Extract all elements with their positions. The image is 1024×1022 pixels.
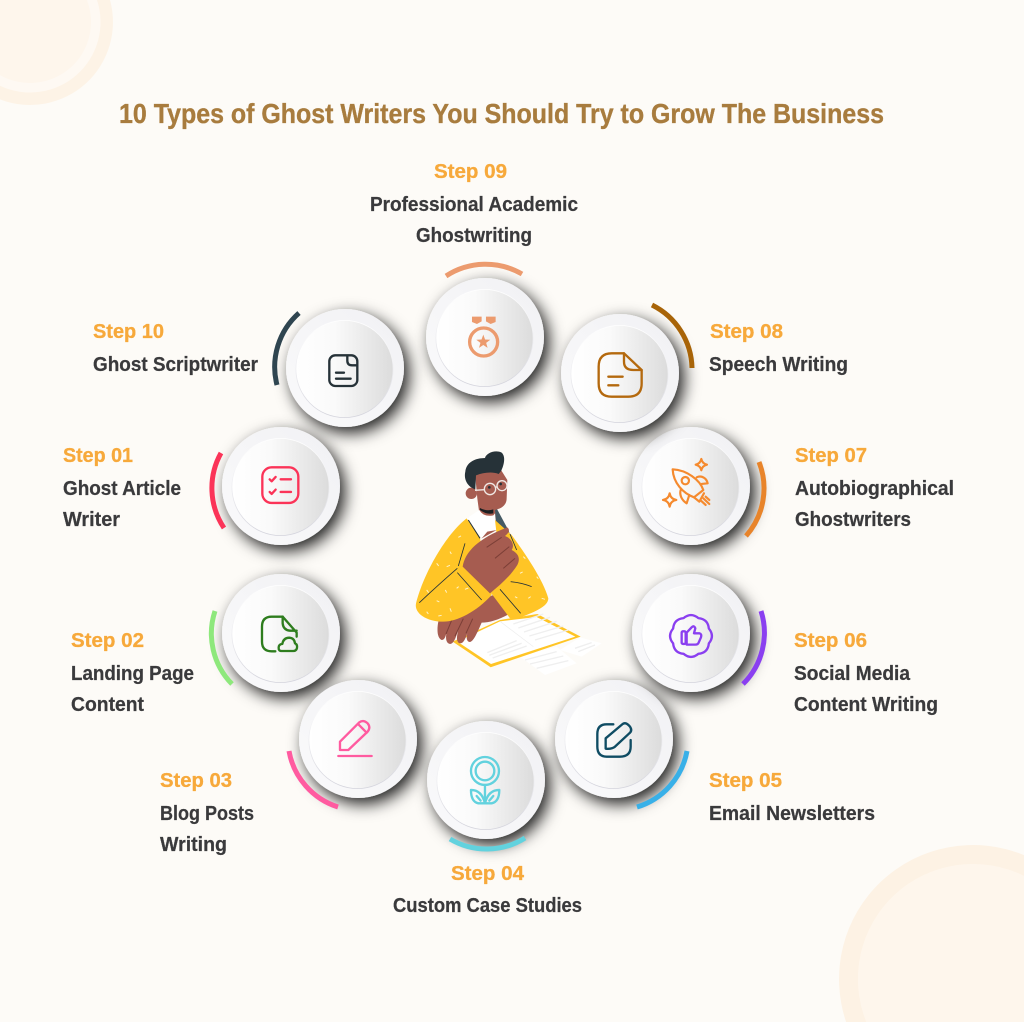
arc: step 07 [746,462,764,536]
label: step 02: Step 02 [71,630,144,652]
icon: thumbs up badge [670,615,712,657]
icon: document [329,355,357,386]
label: step 03: Writing [160,833,227,856]
arc: step 09 [446,264,522,276]
panel: step 02 medallion [222,574,340,692]
panel: step 08 medallion [561,314,679,432]
panel: step 09 medallion [426,278,544,396]
arc: step 05 [637,751,687,807]
label: step 04: Custom Case Studies [393,894,582,917]
label: step 10: Ghost Scriptwriter [93,353,258,376]
icon: edit [597,723,631,757]
arc: step 08 [652,305,692,368]
panel: step 06 medallion [632,574,750,692]
label: step 10: Step 10 [93,321,164,343]
icon: flower [471,757,499,803]
lower hand [437,595,512,644]
label: step 08: Speech Writing [709,353,848,376]
yellow jacket [416,518,492,622]
label: step 01 [63,445,181,531]
label: step 01: Ghost Article [63,477,181,500]
loose paper sheets [520,637,602,675]
panel: step 01 medallion [222,427,340,545]
label: step 05: Email Newsletters [709,802,875,825]
arc: step 02 [211,611,232,684]
label: step 05: Step 05 [709,770,782,792]
jacket fabric lines [419,520,545,616]
label: step 02 [71,630,194,716]
label: step 09 [370,161,578,247]
label: step 03: Step 03 [160,770,232,792]
label: step 01: Step 01 [63,445,133,467]
illustration: thinking writer [416,451,602,675]
label: step 06 [794,630,938,716]
upper hand [463,527,519,593]
label: step 06: Content Writing [794,693,938,716]
arc: step 06 [743,611,764,684]
label: step 06: Social Media [794,662,911,685]
arc: step 10 [275,313,299,385]
label: step 08: Step 08 [710,321,783,343]
open book [453,614,595,668]
label: step 03: Blog Posts [160,802,254,825]
panel: step 03 medallion [299,680,417,798]
label: step 07: Ghostwriters [795,508,911,531]
label: step 08 [709,321,848,376]
icon: pencil [338,721,372,756]
label: step 07: Step 07 [795,445,867,467]
arc: step 04 [450,838,525,849]
label: step 09: Professional Academic [370,193,578,216]
decorative circle: bottom right [839,845,1024,1022]
icon: checklist [262,467,298,503]
panel: step 07 medallion [632,427,750,545]
icon: cloud document [262,617,297,651]
label: step 04 [393,863,582,917]
label: step 09: Ghostwriting [416,224,532,247]
arc: step 03 [289,751,338,807]
neck and head [465,451,507,538]
panel: step 05 medallion [555,680,673,798]
decorative circle: top left [0,0,113,105]
title: 10 Types of Ghost Writers You Should Try to Grow The Business [119,98,884,129]
label: step 06: Step 06 [794,630,867,652]
label: step 03 [160,770,254,856]
icon: medal [470,317,498,356]
pen [494,504,521,573]
label: step 04: Step 04 [451,863,525,885]
label: step 07: Autobiographical [795,477,954,500]
icon: note page [599,353,642,397]
panel: step 04 medallion [427,721,545,839]
label: step 09: Step 09 [434,161,507,183]
label: step 10 [93,321,258,376]
label: step 07 [795,445,954,531]
panel: step 10 medallion [286,309,404,427]
label: step 02: Content [71,693,144,716]
icon: rocket [663,459,709,507]
label: step 02: Landing Page [71,662,194,685]
label: step 01: Writer [63,508,120,531]
arc: step 01 [212,453,224,528]
label: step 05 [709,770,875,825]
